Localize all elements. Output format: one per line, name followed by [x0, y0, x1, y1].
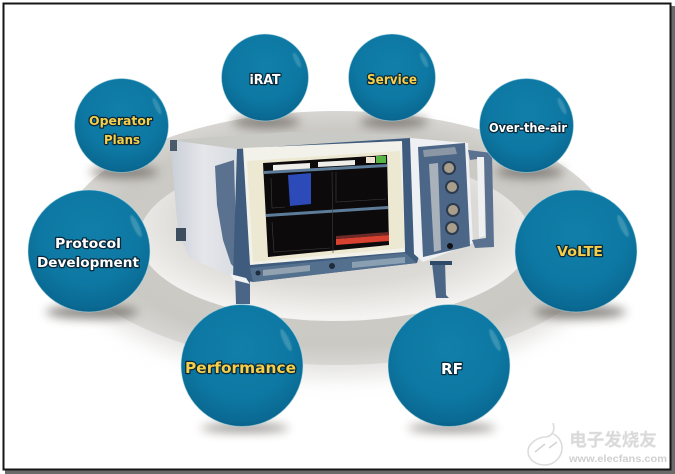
sphere: Protocol Development: Protocol — [55, 237, 121, 252]
sphere: Service — [348, 34, 436, 121]
sphere: Performance — [181, 304, 303, 426]
sphere: iRAT: iRAT — [250, 73, 281, 88]
sphere: RF: RF — [441, 360, 463, 378]
sphere: Over-the-air: Over-the-air — [489, 121, 567, 135]
instrument feet — [235, 261, 452, 304]
instrument screen — [263, 155, 389, 257]
sphere: Over-the-air — [480, 78, 574, 172]
sphere: Protocol Development — [28, 190, 150, 312]
screen bezel — [233, 138, 420, 282]
sphere: Service: Service — [367, 73, 417, 88]
sphere: VoLTE: VoLTE — [557, 244, 603, 260]
ball shadows — [46, 116, 626, 432]
instrument side handle — [215, 160, 237, 270]
right handle — [468, 150, 494, 248]
sphere: Performance: Performance — [185, 359, 296, 377]
connectors — [443, 162, 459, 234]
front controls — [250, 253, 417, 282]
sphere: iRAT — [222, 34, 308, 121]
instrument top and side housing — [170, 132, 412, 151]
sphere: Operator Plans — [74, 78, 168, 172]
watermark: 电子发烧友 — [569, 430, 657, 450]
watermark — [528, 423, 667, 465]
sphere: Operator Plans: Plans — [104, 133, 140, 147]
watermark: www.elecfans.com — [568, 454, 667, 465]
test instrument — [170, 132, 494, 304]
instrument connector panel — [410, 138, 473, 262]
sphere: VoLTE — [515, 190, 637, 312]
sphere: RF — [388, 304, 510, 426]
sphere: Protocol Development: Development — [37, 256, 139, 271]
floor ellipse — [62, 111, 612, 377]
sphere: Operator Plans: Operator — [89, 114, 152, 128]
